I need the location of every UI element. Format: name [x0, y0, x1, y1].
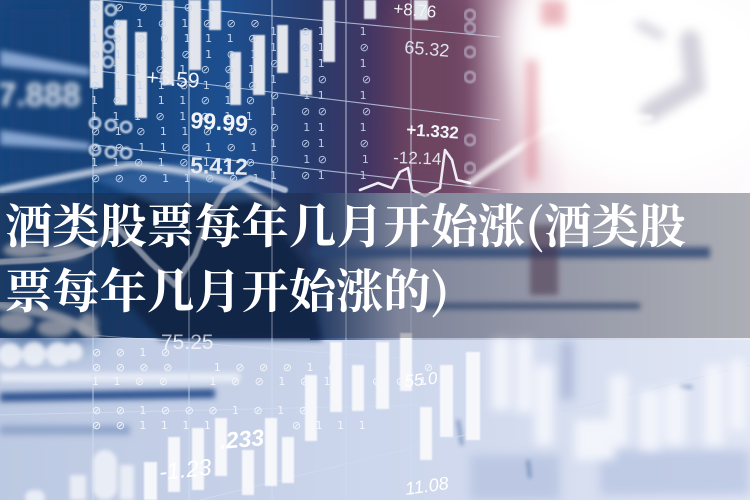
background: blurred value 7.888: 7.888	[0, 76, 81, 113]
value: 55.0: 55.0	[403, 369, 439, 391]
background: pale blurred blocks, lower right	[470, 340, 750, 500]
value: +1.332: +1.332	[406, 120, 459, 143]
background: dark ticks, lower right	[458, 387, 692, 478]
bottom candlestick bars	[144, 333, 480, 500]
value: 233: .233	[218, 424, 265, 454]
value: 99.99: 99.99	[190, 107, 249, 137]
column of blurred dots	[465, 10, 475, 173]
blurred pale bars, lower right	[492, 338, 746, 460]
title band: translucent dark strip	[0, 193, 750, 338]
value: 11.08: 11.08	[404, 473, 450, 499]
top candlestick bars	[90, 0, 428, 118]
value: 75.25: 75.25	[161, 331, 214, 354]
binary digits, lower left: ⊘ ⊘ 1 ⊘ ⊘ ⊘ ⊘ ⊘ 1 ⊘ ⊘ ⊘ 1 ⊘ ⊘ 1 ⊘ 1 1 ⊘ ⊘ 1 ⊘ ⊘ 1 ⊘ 1 ⊘ ⊘ 1 ⊘ ⊘ ⊘ 1 ⊘ ⊘ ⊘ 1 ⊘ 1 ⊘ ⊘ ⊘ 1 1 1 1 1 ⊘ 1 1 1	[92, 346, 456, 432]
value: 5.412: 5.412	[190, 152, 248, 180]
value: -12.14: -12.14	[393, 148, 442, 169]
binary digits, upper left: ⊘ ⊘ ⊘ 1 ⊘ 1 1 ⊘ 1 ⊘ 1 ⊘ ⊘ ⊘ 1 ⊘ ⊘ ⊘ 1 1 1 ⊘ ⊘ 1 ⊘ 1 ⊘ 1 ⊘ 1 1 1 1 ⊘ 1 ⊘ ⊘ 1 ⊘ 1 1 1 ⊘ 1 ⊘ ⊘ 1 ⊘ 1 1 1 ⊘ 1 ⊘ 1 1 1 ⊘ 1 ⊘ 1 1 ⊘ 1 ⊘ 1 1 ⊘ 1 ⊘ ⊘ ⊘ 1 1 ⊘ 1 ⊘ 1 1 1 ⊘ 1 ⊘ 1 1 ⊘ ⊘ ⊘ ⊘ 1 1 ⊘ ⊘ 1	[91, 1, 265, 184]
background: column of blurred digits	[90, 5, 131, 158]
title	[5, 189, 686, 322]
blurred circles, lower left	[0, 342, 134, 500]
title: 票每年几月开始涨的)	[5, 254, 450, 322]
binary digits, upper middle: 1 ⊘ 1 1 1 ⊘ 1 ⊘ ⊘ 1 1 1 1 ⊘ ⊘ ⊘ ⊘ 1 1 1 1 ⊘ ⊘ ⊘ ⊘ 1 1 1 1 ⊘ 1 ⊘ ⊘ 1 ⊘ 1 1 ⊘ 1 1	[270, 25, 373, 182]
red blurred bars	[526, 0, 565, 180]
title: 酒类股票每年几月开始涨(酒类股	[5, 189, 686, 257]
background: blurred grey hand, upper right	[640, 25, 695, 112]
background: scene behind the title band	[310, 193, 750, 340]
background: blurred streaks left	[0, 50, 90, 150]
value: +1.59: +6.59	[146, 66, 200, 93]
background: blurred blobs inside band, left	[0, 242, 98, 337]
background: blurred trend line	[0, 118, 650, 335]
value: 65.32: 65.32	[404, 37, 450, 61]
value: -1.23: -1.23	[158, 454, 213, 485]
background: blurred dark hand	[0, 160, 710, 435]
